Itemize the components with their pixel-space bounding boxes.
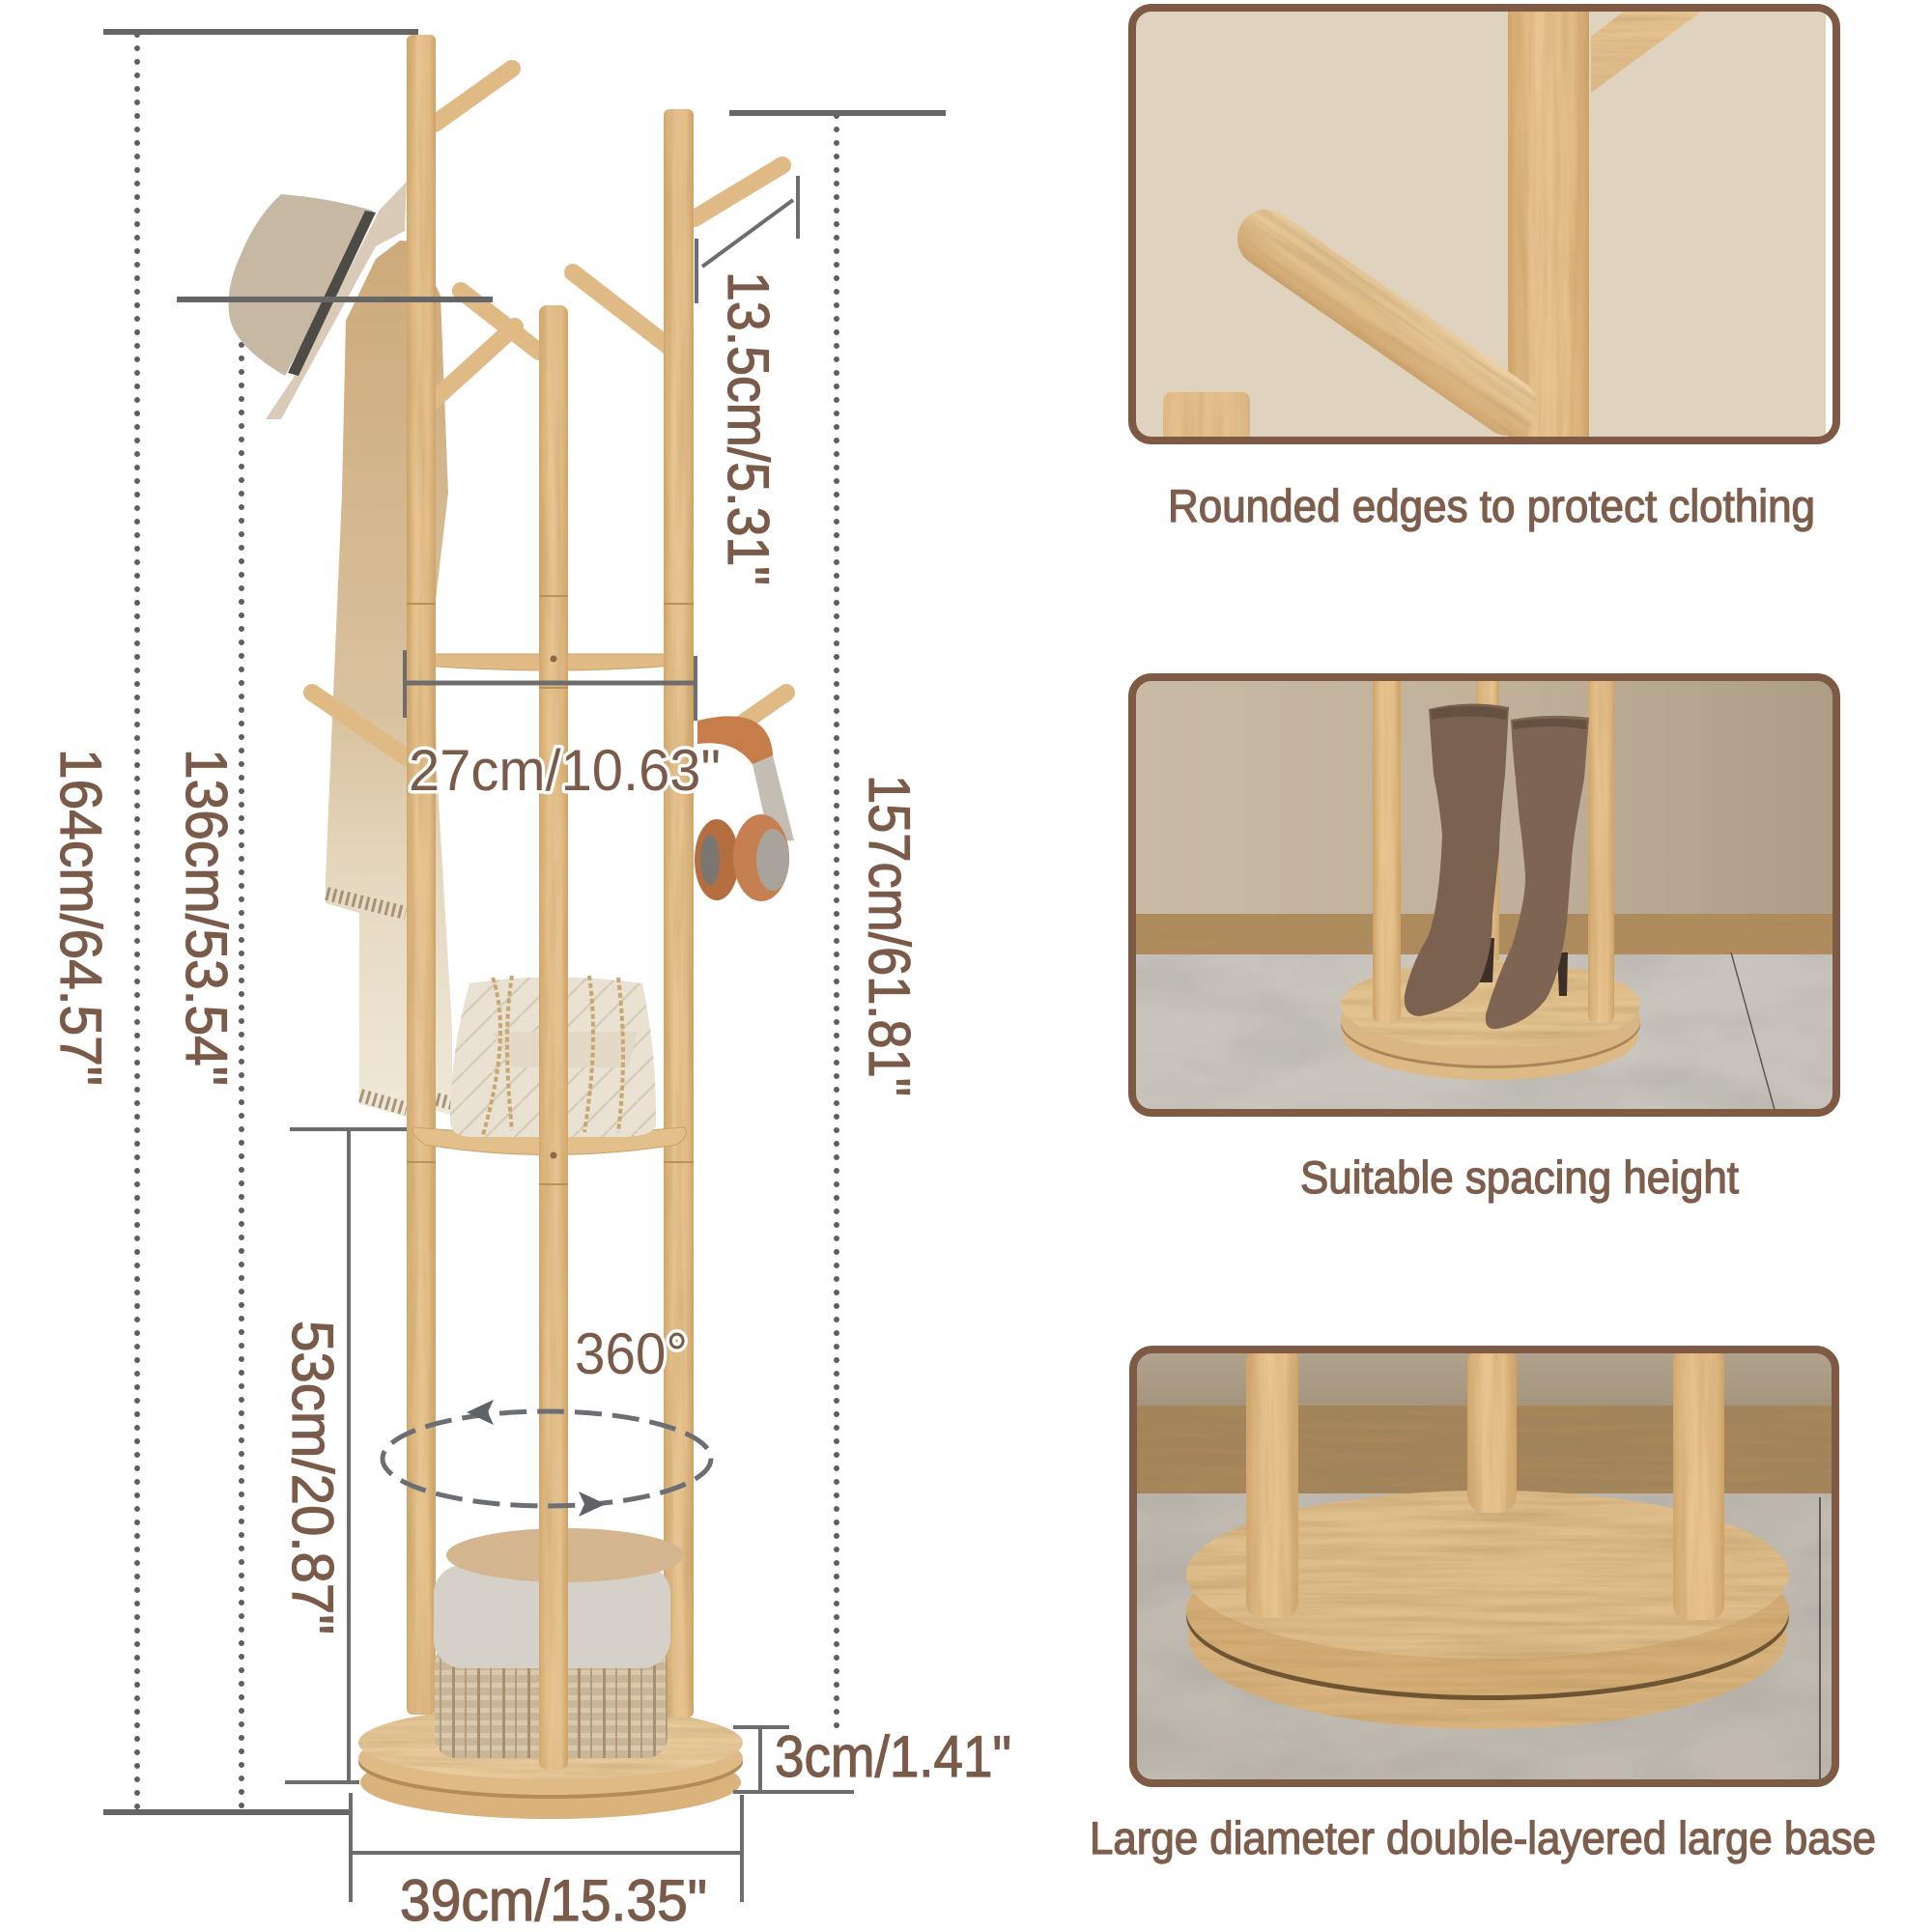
pole joints — [407, 604, 694, 1162]
main post — [1508, 0, 1589, 449]
rotation arrow — [383, 1400, 711, 1517]
stub pole — [1163, 392, 1250, 437]
right pole — [664, 109, 694, 1718]
poles — [1467, 1346, 1517, 1513]
upper branch — [1591, 12, 1701, 93]
label: inner width: 27cm/10.63" — [409, 738, 721, 803]
label: base thickness: 3cm/1.41" — [775, 1724, 1011, 1789]
floor — [1129, 1493, 1839, 1789]
panel 1 background — [1128, 4, 1826, 444]
baseboard — [1129, 1406, 1839, 1495]
dotted height guides — [137, 35, 837, 1812]
handbag — [450, 976, 656, 1137]
label: right pole height: 157cm/61.81" — [857, 775, 922, 1096]
base disc — [358, 1706, 743, 1819]
back pole — [1476, 681, 1499, 960]
boots — [1405, 703, 1589, 1029]
label: hook height: 136cm/53.54" — [174, 749, 239, 1086]
baseboard — [1128, 914, 1840, 954]
base — [1341, 960, 1640, 1080]
scarf — [326, 241, 452, 1117]
hooks — [312, 69, 786, 757]
lower shelf — [413, 1127, 686, 1155]
panel: boots spacing — [1128, 673, 1840, 1119]
label: shelf height: 53cm/20.87" — [280, 1321, 345, 1634]
storage basket — [434, 1528, 684, 1758]
label: total height: 164cm/64.57" — [48, 749, 113, 1086]
left pole — [407, 35, 436, 1715]
wall — [1128, 673, 1840, 915]
pole joints centre — [539, 596, 568, 1184]
illustration: rotating coat rack — [228, 35, 794, 1819]
panel: double-layer base — [1129, 1346, 1839, 1789]
upper shelf — [412, 654, 688, 670]
front poles — [1373, 673, 1401, 1023]
floor — [1128, 954, 1840, 1119]
panel: rounded hook detail — [1128, 0, 1836, 450]
wall — [1137, 1353, 1832, 1406]
label: hook length: 13.5cm/5.31" — [716, 271, 781, 585]
rounded branch — [1236, 209, 1537, 437]
hat — [228, 182, 407, 419]
caption 3: Large diameter double-layered large base — [1090, 1812, 1876, 1863]
scarf fringe — [327, 894, 452, 1109]
headphones — [695, 716, 794, 901]
label: rotation: 360° — [575, 1321, 688, 1386]
caption 1: Rounded edges to protect clothing — [1168, 480, 1815, 531]
pin centres — [551, 655, 556, 1159]
caption 2: Suitable spacing height — [1300, 1151, 1739, 1203]
centre pole — [539, 305, 568, 1770]
base — [1186, 1491, 1789, 1729]
label: base diameter: 39cm/15.35" — [400, 1868, 707, 1932]
dimension lines — [103, 32, 946, 1902]
